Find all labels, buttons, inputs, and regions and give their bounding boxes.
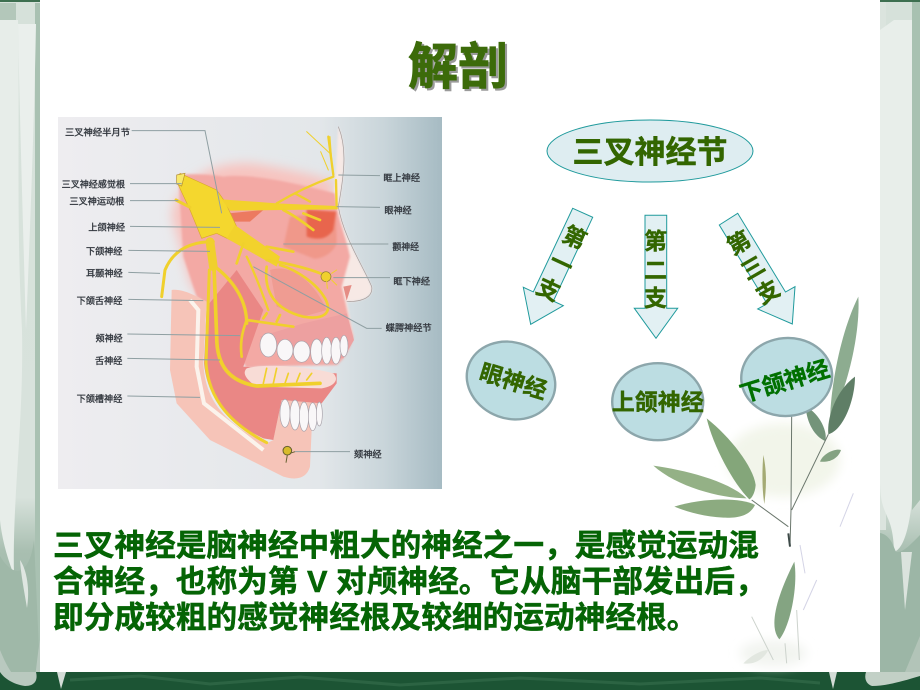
right labels: 眼神经 — [384, 204, 412, 215]
root node: trigeminal ganglion: 三叉神经节 — [572, 135, 728, 170]
arrow: second branch: 支 — [644, 285, 667, 311]
bamboo background illustration — [653, 297, 859, 667]
arrow: second branch: 二 — [644, 257, 667, 283]
left labels: 下颌槽神经 — [77, 393, 122, 404]
left labels — [62, 126, 130, 404]
node: maxillary nerve — [612, 363, 704, 440]
left labels: 下颌舌神经 — [77, 295, 122, 306]
right labels: 眶上神经 — [383, 172, 420, 183]
arrow: third branch: 三 — [737, 251, 769, 285]
right labels: 颏神经 — [354, 448, 382, 459]
right decorative band — [866, 0, 920, 672]
arrow: third branch: 支 — [752, 275, 784, 309]
right labels: 蝶腭神经节 — [386, 322, 432, 333]
right labels — [354, 172, 432, 459]
left labels: 下颌神经 — [86, 245, 122, 256]
node: ophthalmic nerve — [456, 329, 566, 432]
node: ophthalmic nerve: 眼神经 — [477, 359, 550, 404]
description text: 合神经，也称为第 V 对颅神经。它从脑干部发出后， — [53, 564, 766, 599]
arrow: first branch: 支 — [532, 273, 564, 306]
arrow: third branch: 第 — [723, 226, 755, 260]
description text — [53, 528, 766, 635]
left labels: 耳颞神经 — [86, 268, 123, 279]
arrow: third branch — [719, 213, 795, 324]
right labels: 颧神经 — [392, 241, 419, 252]
description text: 即分成较粗的感觉神经根及较细的运动神经根。 — [53, 600, 697, 635]
right labels: 眶下神经 — [393, 275, 430, 286]
arrow: first branch: 一 — [545, 247, 577, 280]
arrow: second branch: 第 — [644, 228, 667, 254]
node: mandibular nerve — [737, 334, 835, 420]
arrow: second branch — [634, 215, 678, 338]
root node: trigeminal ganglion — [547, 120, 753, 182]
left labels: 颊神经 — [96, 333, 123, 344]
left labels: 三叉神运动根 — [69, 195, 124, 206]
anatomy illustration: trigeminal nerve — [58, 117, 442, 489]
left labels: 三叉神经感觉根 — [62, 179, 125, 190]
nerve branches — [162, 132, 337, 463]
teeth — [260, 333, 348, 431]
left labels: 上颌神经 — [88, 222, 125, 233]
left labels: 舌神经 — [95, 355, 122, 366]
arrow: first branch: 第 — [558, 221, 590, 254]
bottom dark green strip — [0, 672, 920, 690]
node: mandibular nerve: 下颌神经 — [737, 355, 832, 407]
leader lines — [127, 131, 390, 452]
description text: 三叉神经是脑神经中粗大的神经之一，是感觉运动混 — [53, 528, 759, 563]
title: 解剖 — [410, 41, 510, 97]
left decorative band — [0, 0, 40, 686]
left labels: 三叉神经半月节 — [65, 126, 130, 137]
title: 解剖 — [408, 39, 508, 95]
head tissue — [170, 127, 372, 478]
arrow: first branch — [523, 208, 593, 324]
node: maxillary nerve: 上颌神经 — [612, 389, 704, 415]
